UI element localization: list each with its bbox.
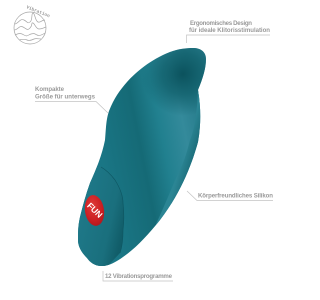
callout: vibration programmes	[103, 271, 173, 281]
icon: vibration badge	[14, 4, 51, 44]
dark upper shading	[147, 48, 206, 111]
callout: compact size: Größe für unterwegs	[35, 94, 96, 100]
callout: body-friendly silicone	[187, 191, 273, 200]
badge label: Vibration	[25, 4, 51, 19]
callout: compact size	[35, 86, 108, 113]
logo text: FUN	[85, 200, 105, 220]
handle seam	[101, 167, 124, 253]
main body	[78, 48, 206, 266]
right wing	[156, 90, 205, 224]
callout: ergonomic design: Ergonomisches Design	[190, 20, 252, 27]
button: FUN logo	[83, 194, 106, 227]
callout: ergonomic design: für ideale Klitorisstimulation	[189, 27, 270, 34]
callout: vibration programmes: 12 Vibrationsprogramme	[105, 273, 173, 280]
callout: ergonomic design	[186, 20, 270, 43]
lower handle section	[78, 166, 124, 266]
callout: compact size: Kompakte	[35, 86, 65, 93]
callout: body-friendly silicone: Körperfreundliches Silikon	[198, 192, 273, 200]
product: vibrator body	[78, 48, 206, 266]
